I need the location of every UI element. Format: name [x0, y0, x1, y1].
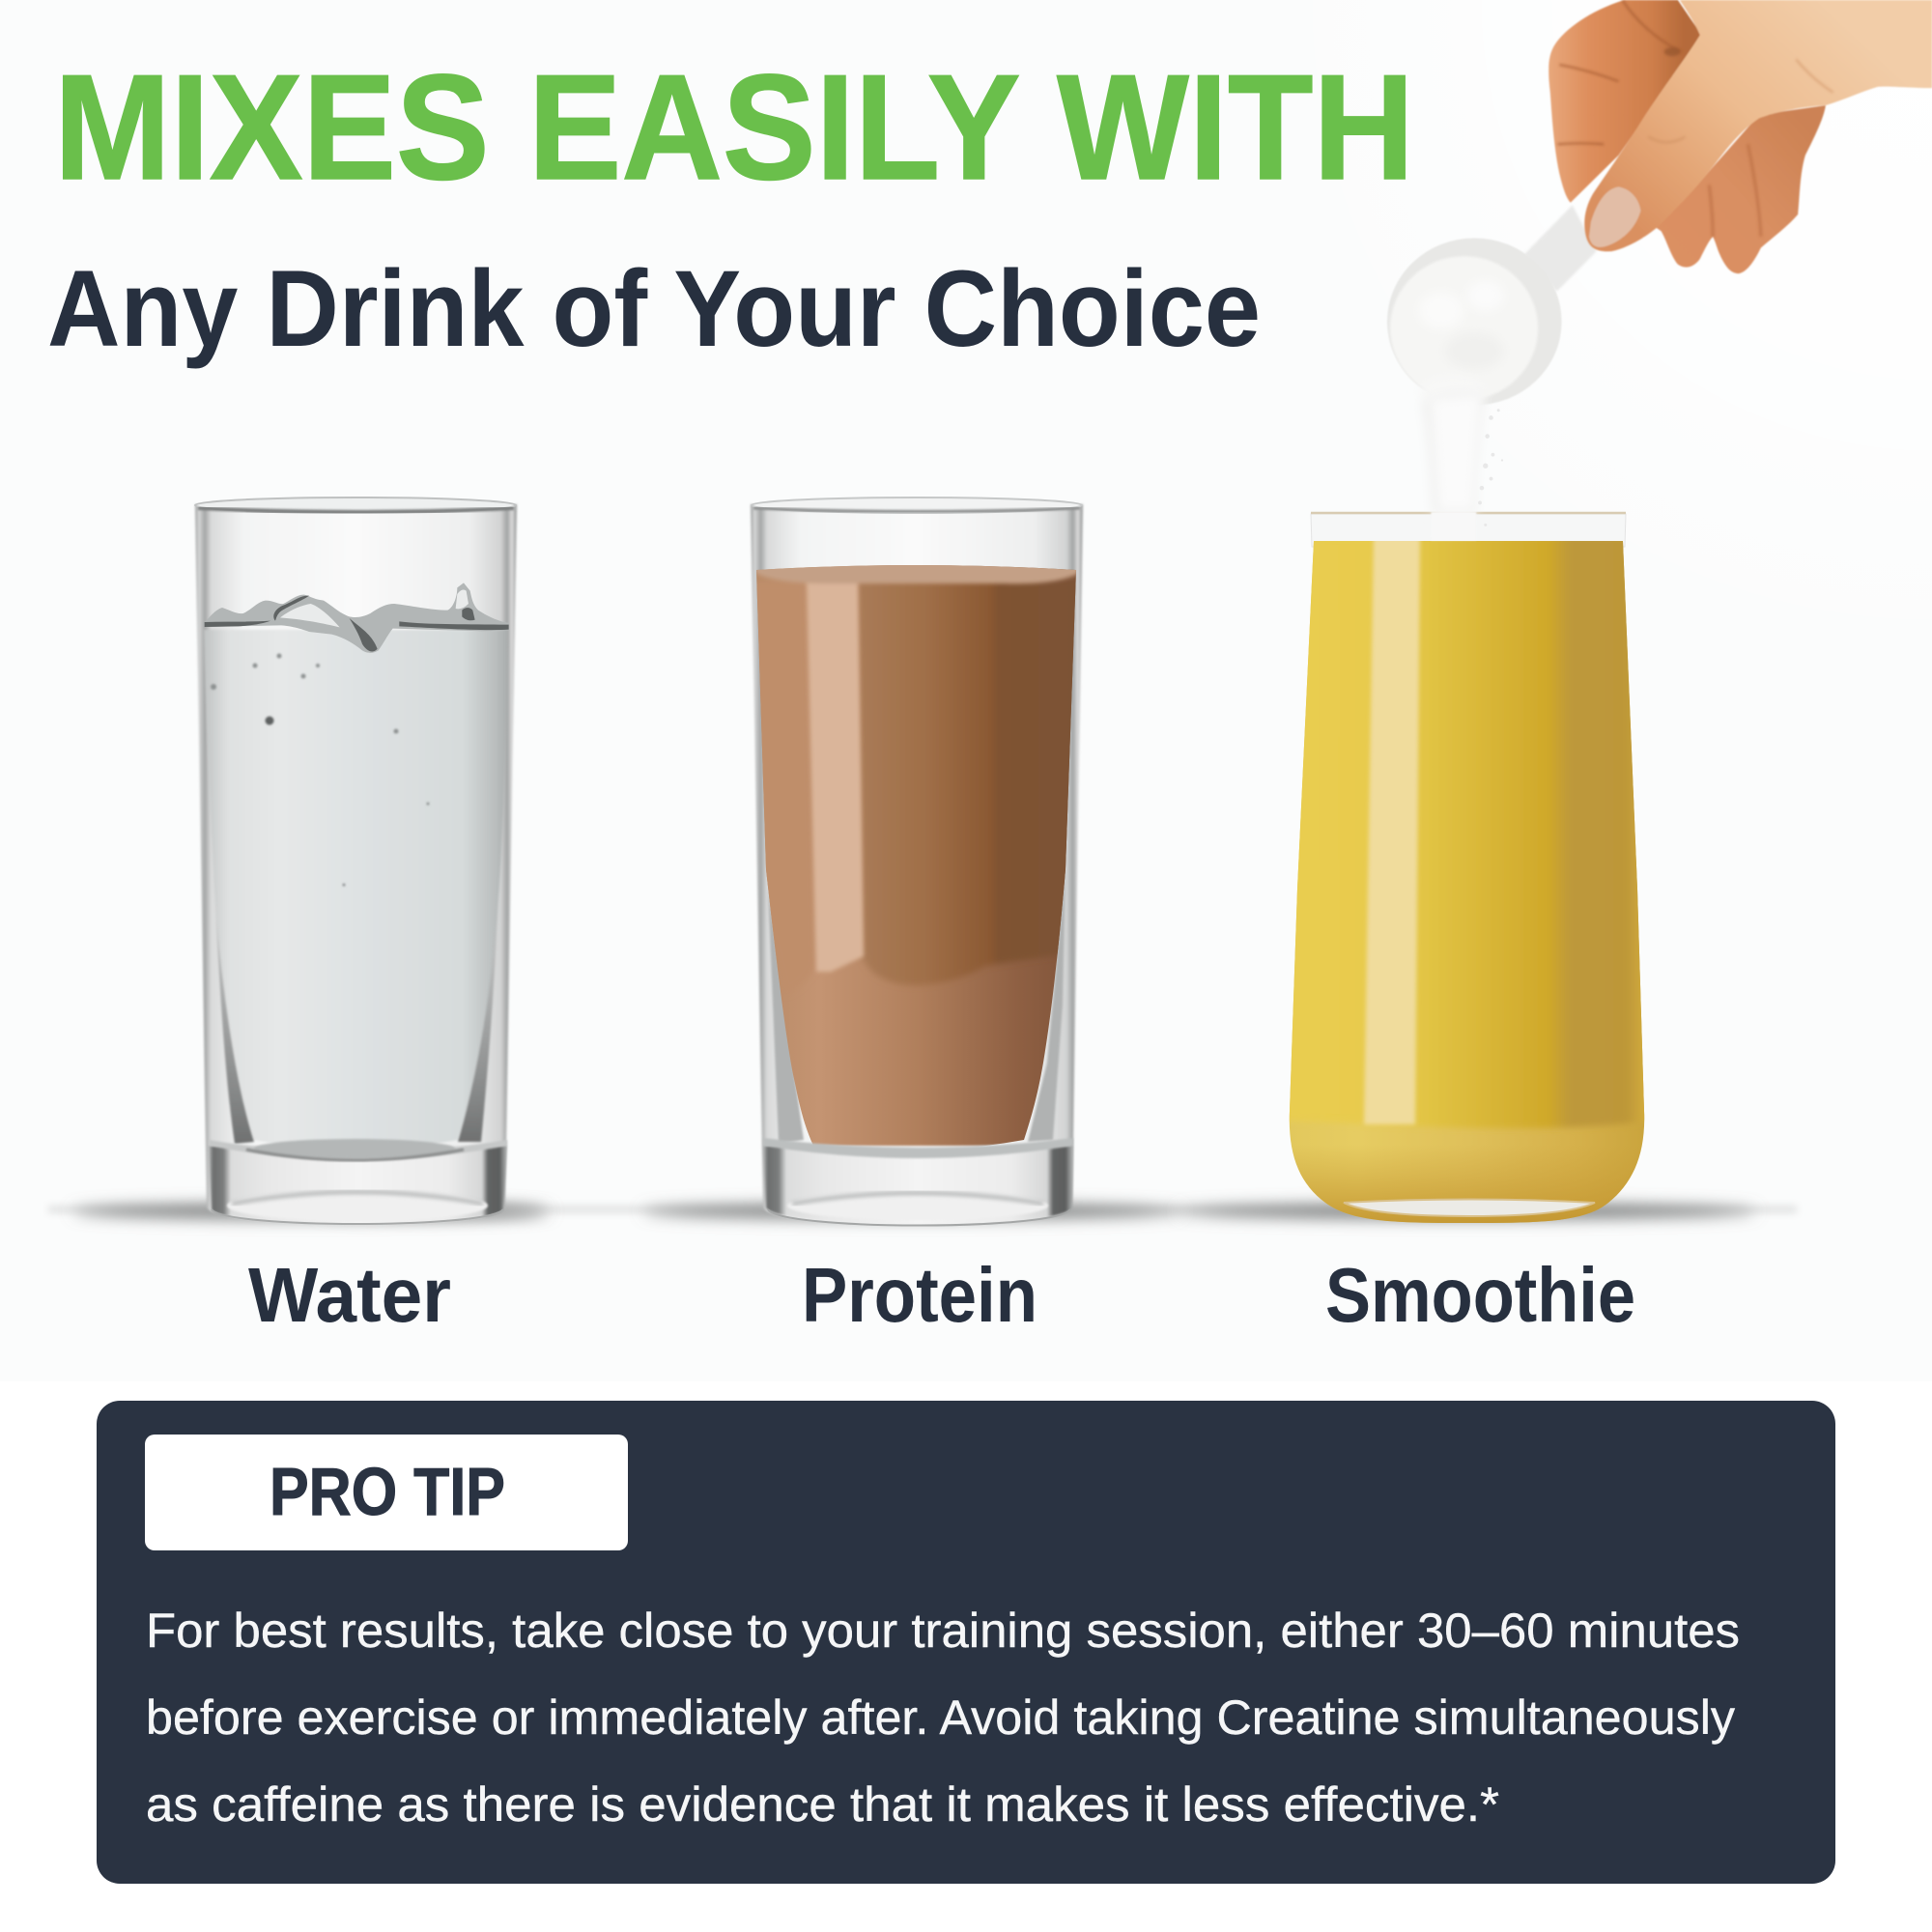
pro tip badge — [145, 1435, 628, 1550]
label: water: Water — [248, 1252, 451, 1338]
thumbnail — [1589, 186, 1641, 247]
finger creases — [1709, 144, 1761, 237]
chocolate liquid — [753, 560, 1082, 1159]
upper darker tone — [1285, 536, 1652, 1128]
hand — [1548, 0, 1932, 273]
liquid base — [753, 560, 1082, 1159]
powder speckles — [1478, 409, 1503, 526]
scoop cup — [1387, 238, 1562, 405]
glass rim band — [1311, 514, 1626, 547]
scoop handle — [1524, 205, 1597, 292]
glass: protein shake — [751, 497, 1083, 1225]
tip text — [146, 1604, 1740, 1832]
water surface splash — [205, 582, 509, 653]
tip text: For best results, take close to your training session, either 30–60 minutes — [146, 1604, 1740, 1658]
left glass wedge — [768, 889, 804, 1144]
bottom darkening — [1294, 1157, 1638, 1223]
panel: pro tip — [97, 1401, 1835, 1884]
label: protein: Protein — [802, 1252, 1037, 1338]
glass base — [763, 1138, 1073, 1225]
rim — [195, 497, 516, 513]
glass: smoothie — [1285, 513, 1652, 1227]
knuckle creases — [1648, 59, 1833, 142]
glass body — [195, 504, 517, 1223]
scoop powder — [1390, 256, 1538, 409]
bottom lens — [1344, 1200, 1595, 1216]
highlight band — [1364, 536, 1420, 1124]
title: MIXES EASILY WITH — [54, 43, 1414, 211]
rim — [752, 497, 1082, 513]
powder stream — [1421, 392, 1503, 541]
pro tip badge: PRO TIP — [270, 1454, 505, 1529]
glass body — [751, 504, 1083, 1225]
glass base — [209, 1139, 507, 1224]
left liquid strip — [757, 587, 778, 968]
rim line — [1311, 512, 1626, 514]
subtitle: Any Drink of Your Choice — [47, 248, 1261, 369]
glass: water — [195, 497, 517, 1224]
tip text: as caffeine as there is evidence that it makes it less effective.* — [146, 1777, 1499, 1832]
lower tone — [1285, 536, 1652, 1227]
left inner wall shadow — [213, 869, 254, 1144]
back fingers — [1656, 105, 1826, 273]
tip text: before exercise or immediately after. Avoid taking Creatine simultaneously — [146, 1690, 1735, 1745]
liquid meniscus — [756, 565, 1076, 586]
smoothie liquid — [1285, 536, 1652, 1227]
floor shadow — [48, 1204, 1797, 1219]
scoop and hand — [1387, 0, 1932, 541]
water fill — [204, 630, 508, 1150]
right inner wall shadow — [458, 898, 498, 1142]
right glass wedge — [1028, 869, 1065, 1142]
crease shadow — [1664, 47, 1680, 56]
highlight band — [807, 580, 864, 972]
water bubbles — [211, 653, 429, 887]
index finger — [1548, 0, 1702, 203]
label: smoothie: Smoothie — [1325, 1252, 1635, 1338]
index creases — [1557, 0, 1682, 144]
darker upper liquid — [858, 580, 1082, 985]
thumb and palm — [1584, 0, 1932, 251]
